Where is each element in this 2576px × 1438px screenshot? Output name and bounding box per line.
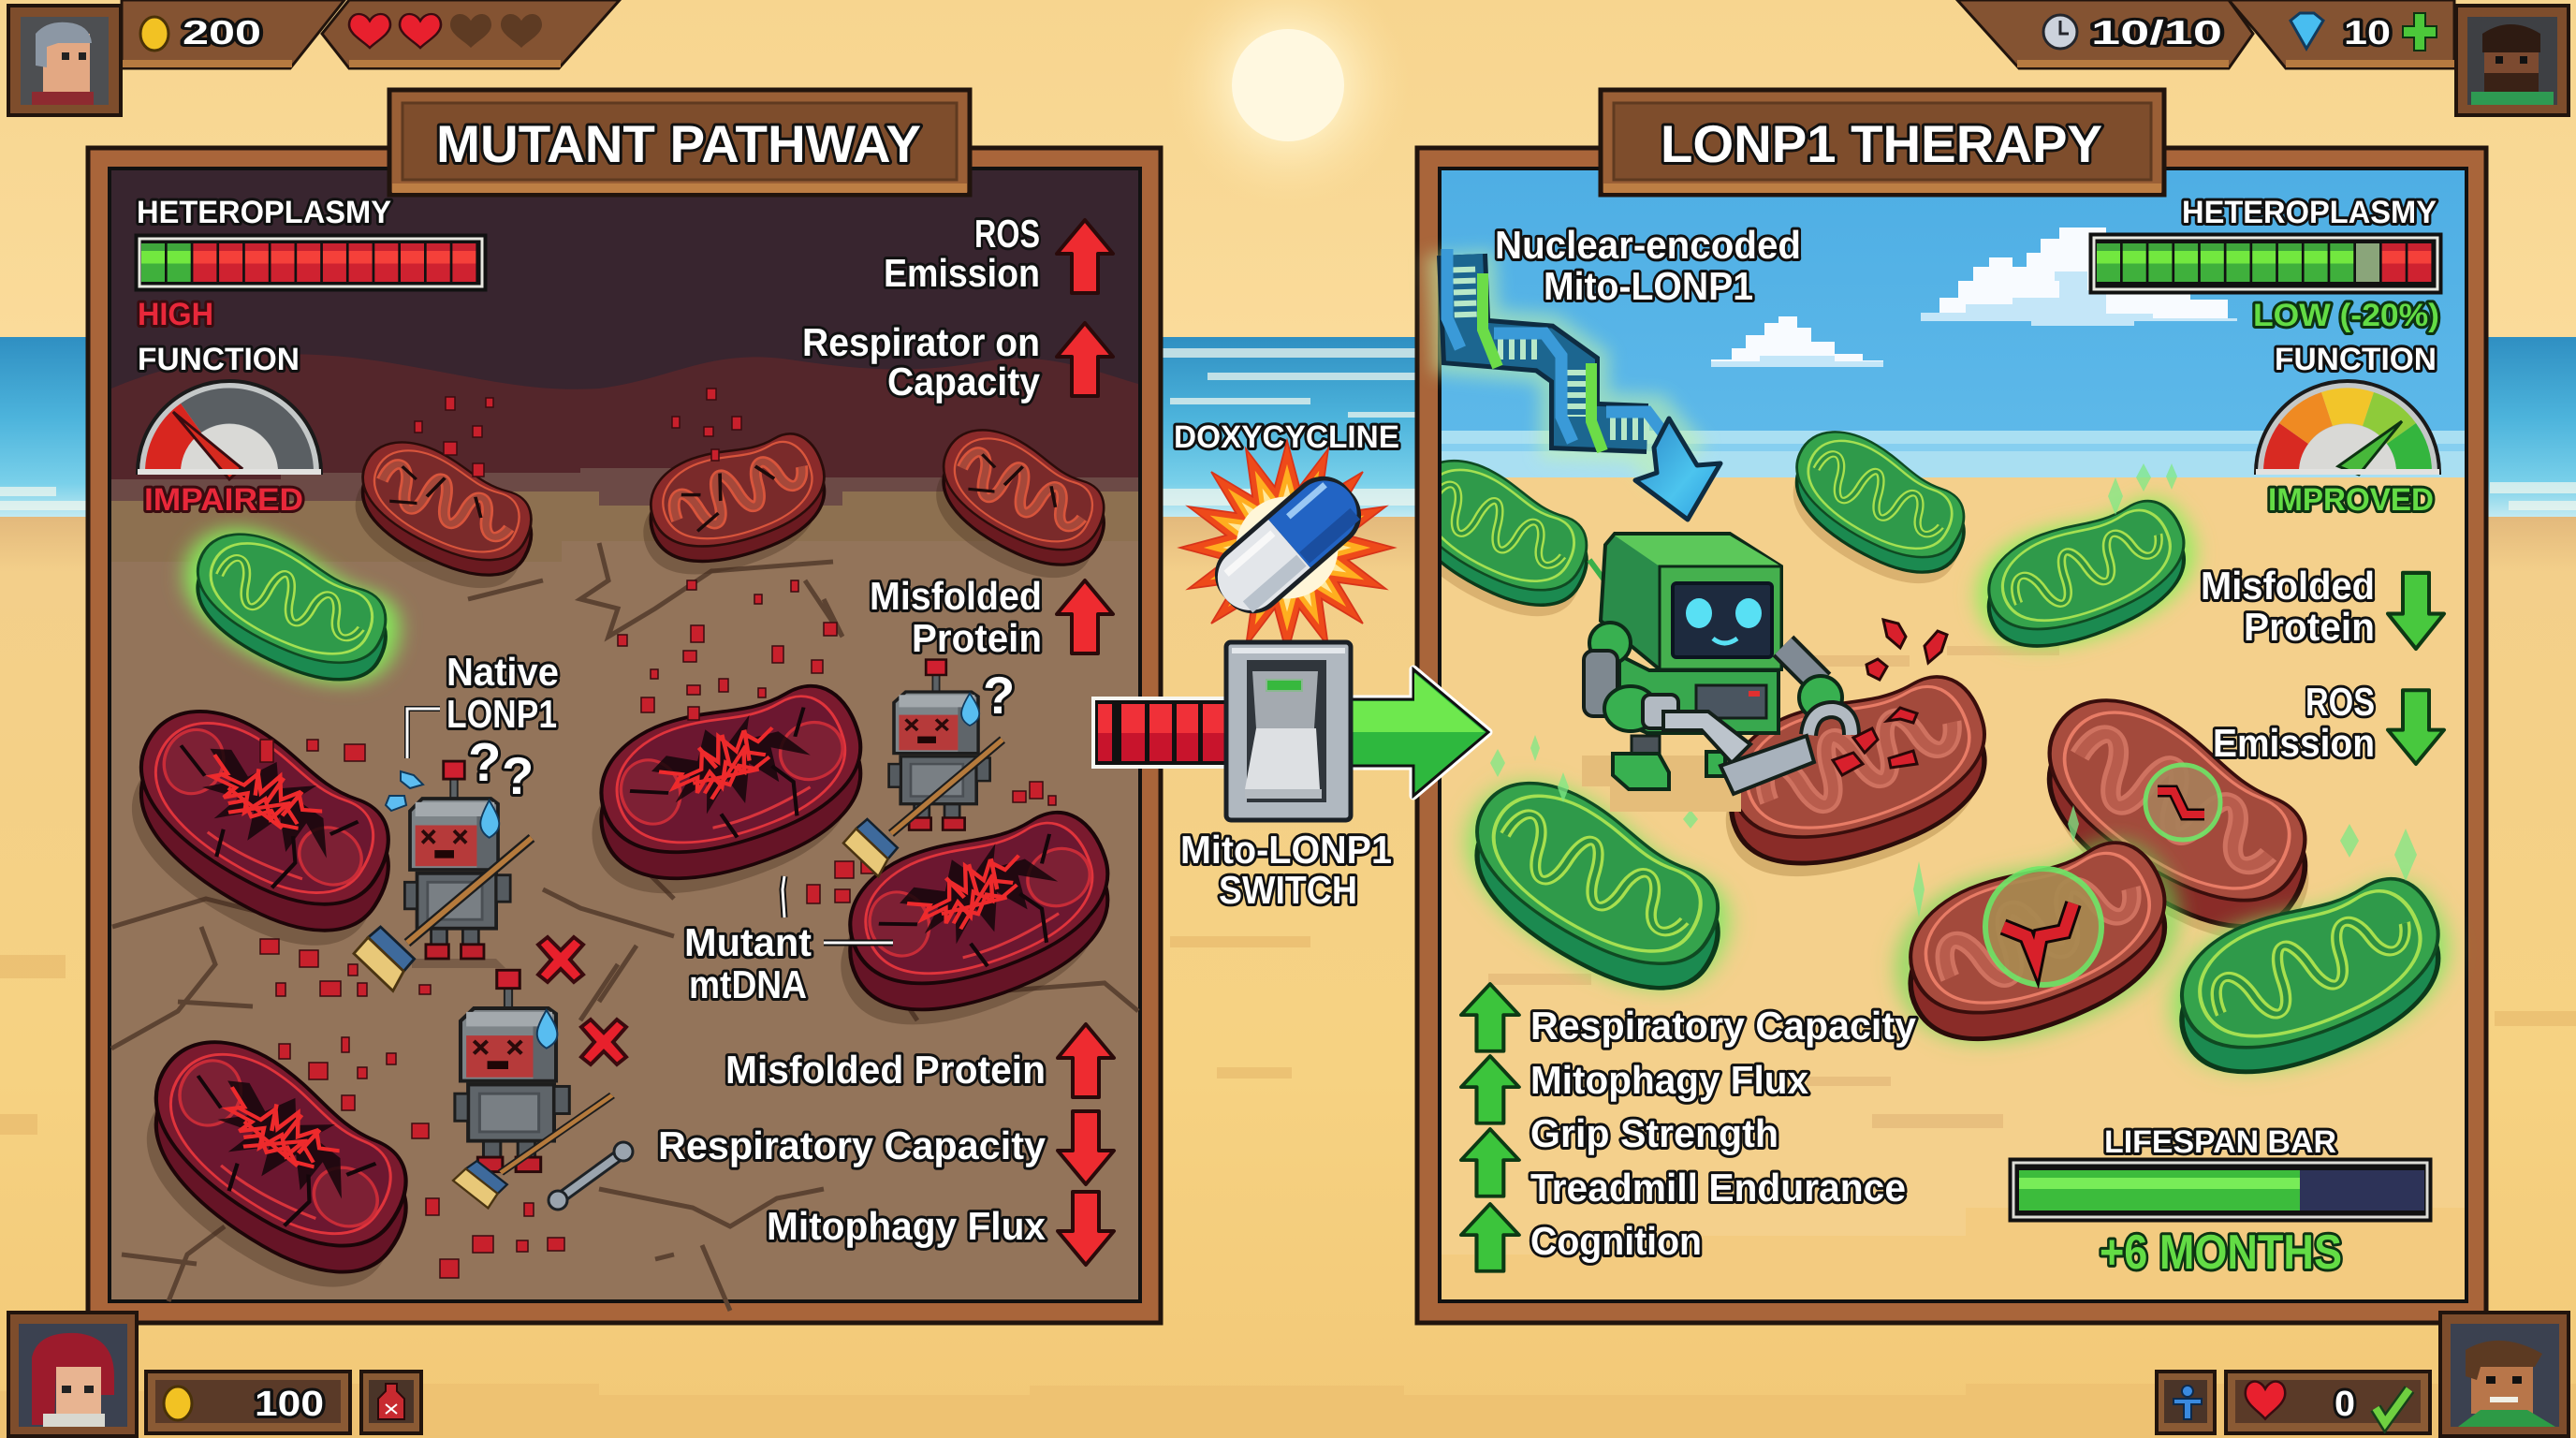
question mark: ?: [983, 666, 1015, 725]
label: mito-LONP1 switch: [1180, 828, 1392, 912]
readout: misfolded protein up: Protein: [912, 616, 1042, 660]
robot: worker, right: [843, 660, 1003, 876]
label: mito-LONP1 switch: Mito-LONP1: [1180, 828, 1392, 872]
mitochondrion: top centre: [630, 411, 839, 601]
label: mito-LONP1 switch: SWITCH: [1219, 868, 1357, 912]
robot right arm: [1783, 646, 1852, 735]
gem bar: [2229, 0, 2454, 68]
plaque: mutant pathway title: MUTANT PATHWAY: [436, 114, 921, 173]
icon: failure X: [581, 1020, 626, 1064]
coin bar: [122, 0, 344, 68]
mitochondrion: green bottom left: [1438, 760, 1753, 1014]
portrait: grey-haired player: [8, 6, 121, 115]
coin bar: 100: [255, 1385, 324, 1424]
readout: ROS emission down: [2213, 680, 2444, 765]
label: nuclear-encoded Mito-LONP1: Mito-LONP1: [1544, 264, 1753, 308]
mitochondrion: green bottom right: [2150, 845, 2471, 1111]
outcome: respiratory capacity: Respiratory Capacity: [1530, 1004, 1917, 1048]
time bar: [1957, 0, 2253, 68]
outcome: grip strength: [1461, 1111, 1778, 1196]
readout: respiration capacity up: [802, 320, 1113, 404]
mitochondrion: being repaired, under robot: [1707, 644, 2005, 914]
label: low -20%: LOW (-20%): [2253, 298, 2439, 333]
panel: mutant pathway: [88, 148, 1161, 1323]
repair focus: small: [2145, 765, 2220, 840]
cloud large: [1921, 227, 2237, 326]
readout: misfolded protein up: Misfolded Protein: [725, 1048, 1046, 1092]
mitochondrion: glowing green: [1958, 467, 2217, 682]
panel scene background: [1440, 169, 2466, 1301]
mitochondrion: being repaired, right: [2019, 676, 2334, 967]
heart and check bar: [2226, 1372, 2430, 1433]
readout: respiration capacity up: Capacity: [887, 360, 1041, 404]
mitochondrion: damaged A: [103, 689, 413, 972]
mitochondrion: damaged D: [114, 1018, 432, 1315]
protein debris: [260, 389, 1056, 1278]
figure slot: [2157, 1372, 2215, 1433]
time bar: 10/10: [2091, 13, 2222, 51]
readout: respiratory capacity down: [658, 1111, 1114, 1184]
gem bar: 10: [2344, 13, 2391, 51]
HUD: top right stats: [1957, 0, 2569, 115]
potion slot: [361, 1372, 421, 1433]
readout: mitophagy flux down: Mitophagy Flux: [767, 1204, 1046, 1248]
gauge: impaired function: [138, 381, 321, 479]
question marks: ?: [502, 746, 534, 805]
coin bar: [146, 1372, 350, 1433]
readout: ROS emission up: ROS: [974, 212, 1040, 256]
icon: failure X: [538, 937, 583, 982]
HUD: bottom left stats: [8, 1313, 421, 1436]
readout: misfolded protein down: Misfolded: [2201, 564, 2375, 608]
mitochondrion: damaged C: [820, 779, 1130, 1064]
mitochondrion: top left: [340, 429, 545, 604]
plaque: mutant pathway title: [389, 90, 970, 195]
label: heteroplasmy: HETEROPLASMY: [2182, 195, 2437, 230]
panel frame: [1417, 148, 2486, 1323]
repair sparkles: [1490, 463, 2417, 917]
readout: respiratory capacity down: Respiratory Capacity: [658, 1123, 1046, 1167]
panel frame: [88, 148, 1161, 1323]
label: heteroplasmy: HETEROPLASMY: [137, 195, 391, 230]
repair focus: large: [1985, 869, 2101, 985]
plaque: LONP1 therapy title: [1601, 90, 2164, 195]
mitochondrion: being repaired, lower: [1885, 810, 2192, 1078]
robot torso: [1619, 655, 1778, 733]
bar: red inactive input: [1093, 698, 1230, 767]
icon: sun: [1166, 0, 1410, 207]
readout: ROS emission down: Emission: [2213, 721, 2375, 765]
mitochondrion: damaged B: [572, 653, 882, 932]
readout: misfolded protein up: [870, 574, 1113, 660]
label: native LONP1: LONP1: [446, 692, 557, 736]
label: doxycycline: DOXYCYCLINE: [1174, 419, 1399, 455]
portrait: brown-haired player: [2440, 1313, 2569, 1436]
bar: heteroplasmy low: [2091, 235, 2440, 292]
question marks: [468, 732, 534, 805]
panel scene background: [110, 169, 1140, 1311]
robot vacuum: [1663, 712, 1814, 794]
label: native LONP1: Native: [446, 650, 559, 694]
mitochondrion: healthy green: [164, 512, 417, 703]
gauge: improved function: [2256, 381, 2439, 475]
protein fragments: [1833, 620, 1947, 775]
robot: native LONP1 worker, left: [354, 761, 532, 990]
readout: misfolded protein down: Protein: [2244, 605, 2375, 649]
DNA helix arrow: [1447, 249, 1720, 520]
label: function: FUNCTION: [2275, 342, 2437, 377]
readout: ROS emission up: Emission: [884, 251, 1040, 295]
portrait: red-haired player: [8, 1313, 137, 1436]
icon: mito-LONP1 switch: [1226, 642, 1351, 820]
bar: heteroplasmy high: [137, 236, 485, 289]
arrow: green output: [1348, 669, 1488, 796]
label: native LONP1: [407, 650, 559, 758]
readout: respiration capacity up: Respirator on: [802, 320, 1040, 364]
outcome: cognition: [1461, 1204, 1702, 1271]
robot shadow: [1582, 756, 1741, 812]
cloud small: [1711, 316, 1883, 367]
robot head: [1601, 534, 1781, 669]
label: plus six months: +6 MONTHS: [2100, 1225, 2342, 1280]
label: nuclear-encoded Mito-LONP1: Nuclear-encoded: [1495, 223, 1801, 267]
readout: misfolded protein down: [2201, 564, 2444, 649]
hearts bar: [322, 0, 620, 68]
mitochondrion: top green: [1775, 418, 1979, 600]
panel: LONP1 therapy: [1390, 148, 2486, 1323]
mitochondrion: top right: [919, 417, 1118, 594]
label: impaired: IMPAIRED: [144, 482, 303, 518]
mitochondrion: clipped left: [1390, 446, 1602, 634]
outcome: respiratory capacity: [1461, 984, 1917, 1051]
label: function: FUNCTION: [138, 342, 300, 377]
robot left arm: [1584, 623, 1678, 731]
icon: explosion: [1180, 441, 1394, 654]
centre: doxycycline switch: [1093, 419, 1488, 912]
icon: wrench: [549, 1142, 633, 1210]
ground cracks: [111, 543, 1138, 1311]
outcomes list: [1461, 984, 1917, 1271]
label: nuclear-encoded Mito-LONP1: [1495, 223, 1801, 308]
readout: mitophagy flux down: [767, 1192, 1114, 1265]
icon: capsule: [1202, 463, 1374, 626]
outcome: mitophagy flux: [1461, 1056, 1809, 1123]
outcome: grip strength: Grip Strength: [1530, 1111, 1778, 1155]
readout: misfolded protein up: Misfolded: [870, 574, 1042, 618]
label: high: HIGH: [138, 297, 213, 332]
outcome: mitophagy flux: Mitophagy Flux: [1530, 1058, 1809, 1102]
readout: ROS emission up: [884, 212, 1113, 295]
readout: ROS emission down: ROS: [2305, 680, 2375, 724]
HUD: bottom right stats: [2157, 1313, 2569, 1436]
outcome: cognition: Cognition: [1530, 1219, 1702, 1263]
label: mutant mtDNA: Mutant: [684, 920, 812, 964]
outcome: treadmill endurance: Treadmill Endurance: [1530, 1166, 1906, 1210]
plaque: LONP1 therapy title: LONP1 THERAPY: [1661, 114, 2102, 173]
HUD: top left stats: [8, 0, 620, 115]
robot antenna: [1589, 560, 1613, 592]
bar: lifespan: [2011, 1160, 2430, 1220]
question marks: ?: [468, 732, 501, 793]
label: improved: IMPROVED: [2268, 482, 2434, 518]
label: mutant mtDNA: [684, 876, 893, 1006]
portrait: bearded player: [2456, 6, 2569, 115]
label: lifespan bar: LIFESPAN BAR: [2104, 1124, 2336, 1160]
readout: misfolded protein up: [725, 1024, 1114, 1097]
label: mutant mtDNA: mtDNA: [689, 962, 807, 1006]
robot feet: [1613, 736, 1725, 789]
robot: green LONP1 robot: [1582, 534, 1852, 812]
heart and check bar: 0: [2334, 1385, 2355, 1424]
coin bar: 200: [183, 13, 261, 51]
robot: worker, bottom: [453, 970, 612, 1208]
